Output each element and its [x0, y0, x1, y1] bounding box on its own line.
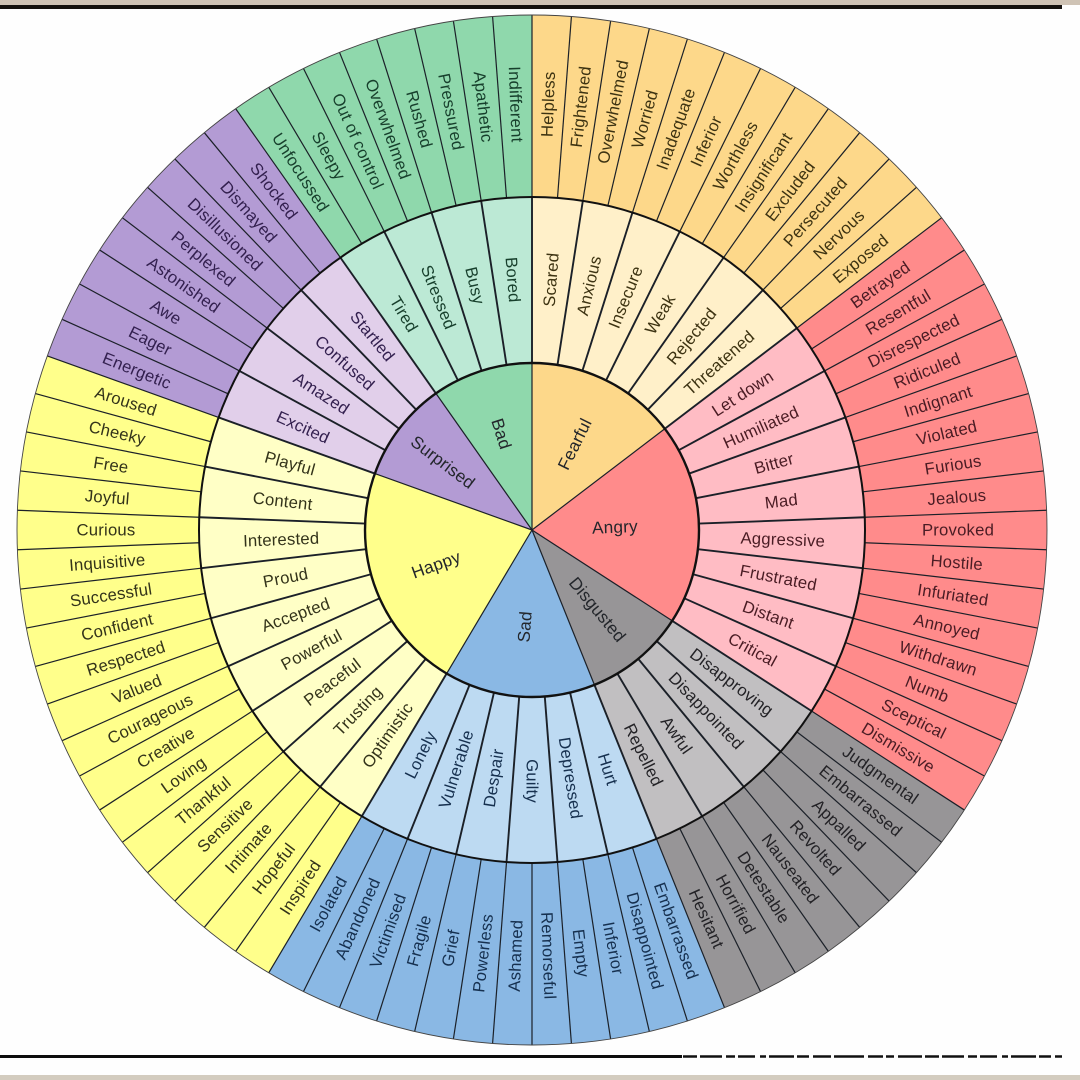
outer labels: Angry: Numb: [903, 672, 952, 707]
outer labels: Sad: Grief: [438, 928, 464, 968]
middle labels: Fearful: Insecure: [605, 263, 647, 331]
bottom border band: [0, 1055, 1080, 1080]
outer labels: Happy: Confident: [79, 609, 155, 645]
middle wedge: Angry: [532, 328, 865, 711]
outer labels: Happy: Creative: [134, 723, 198, 772]
outer labels: Bad: Pressured: [434, 72, 468, 152]
outer labels: Happy: Loving: [157, 753, 210, 797]
outer labels: Disgusted: Judgmental: [839, 742, 922, 808]
outer labels: Angry: Violated: [915, 417, 979, 449]
outer labels: Disgusted: Horrified: [712, 871, 759, 937]
middle labels: Sad: Hurt: [594, 751, 622, 788]
middle wedge: Bad: [340, 197, 532, 530]
inner wedge: Disgusted: [532, 530, 672, 685]
outer labels: Angry: Ridiculed: [891, 349, 963, 393]
outer labels: Fearful: Persecuted: [780, 173, 851, 251]
outer labels: Fearful: Worthless: [709, 118, 762, 194]
core emotion labels: [407, 415, 638, 646]
outer labels: Surprised: [100, 159, 301, 393]
outer labels: Happy: Courageous: [104, 690, 196, 748]
outer labels: Surprised: Astonished: [144, 253, 224, 317]
middle labels: Fearful: Scared: [540, 252, 563, 307]
outer labels: Fearful: Inferior: [687, 113, 726, 170]
middle labels: Sad: Despair: [480, 747, 508, 809]
outer labels: Angry: Resentful: [862, 286, 934, 339]
core emotion labels: Disgusted: [565, 573, 630, 646]
middle labels: Bad: Bored: [502, 256, 524, 303]
middle labels: Surprised: Excited: [273, 407, 332, 447]
outer labels: Bad: Rushed: [402, 88, 436, 150]
middle labels: Sad: Guilty: [522, 759, 542, 803]
outer labels: Surprised: Eager: [126, 322, 175, 360]
outer labels: Surprised: Awe: [147, 296, 185, 329]
middle labels: Bad: Stressed: [417, 262, 460, 332]
outer labels: Happy: Inspired: [276, 857, 325, 918]
middle labels: Sad: Lonely: [401, 728, 441, 782]
middle labels: Disgusted: [620, 644, 777, 789]
outer labels: Sad: Abandoned: [331, 875, 384, 962]
middle labels: Bad: Busy: [461, 265, 488, 307]
outer labels: Angry: Hostile: [930, 551, 984, 574]
sector: Sad: [269, 530, 725, 1045]
outer labels: Bad: Apathetic: [470, 70, 497, 143]
middle labels: Happy: Peaceful: [300, 654, 365, 710]
outer labels: Happy: Hopeful: [248, 840, 299, 898]
outer labels: Happy: Joyful: [84, 486, 130, 509]
middle labels: Disgusted: Disappointed: [665, 668, 748, 753]
middle labels: Disgusted: Repelled: [620, 720, 667, 789]
middle labels: Happy: Powerful: [278, 626, 345, 674]
inner wedge: Happy: [365, 474, 532, 674]
outer labels: Sad: Powerless: [469, 913, 497, 993]
outer labels: Disgusted: Detestable: [733, 848, 794, 927]
outer labels: Bad: Indifferent: [505, 66, 527, 143]
outer labels: Happy: Curious: [77, 520, 135, 540]
outer labels: Surprised: Perplexed: [168, 227, 239, 291]
middle labels: Fearful: [540, 252, 758, 399]
top border band: [0, 0, 1080, 9]
middle labels: Surprised: Confused: [311, 332, 378, 394]
outer wedge: Bad: [236, 15, 532, 530]
outer labels: Surprised: Energetic: [100, 348, 174, 393]
outer wedge: Surprised: [47, 109, 532, 530]
outer labels: Sad: Isolated: [306, 873, 351, 935]
outer labels: Angry: Dismissive: [858, 719, 938, 777]
middle labels: Angry: Bitter: [752, 449, 796, 478]
outer labels: Fearful: Insignificant: [731, 129, 796, 216]
inner wedge: Sad: [447, 530, 594, 697]
outer wedge: Sad: [269, 530, 725, 1045]
core emotion labels: Angry: [592, 516, 638, 538]
outer labels: Angry: Annoyed: [912, 610, 982, 644]
middle labels: Angry: [708, 367, 825, 671]
outer labels: Bad: Unfocussed: [268, 129, 333, 215]
outer labels: Fearful: Inadequate: [653, 86, 699, 173]
core emotion labels: Surprised: [407, 431, 479, 493]
middle labels: Angry: Distant: [740, 597, 797, 633]
outer wedge: Disgusted: [532, 530, 964, 1008]
outer labels: Happy: Intimate: [221, 819, 276, 877]
outer labels: Surprised: Disillusioned: [184, 194, 266, 275]
sector: Happy: [17, 356, 532, 973]
outer labels: Sad: Disappointed: [622, 890, 667, 991]
outer labels: Surprised: Dismayed: [216, 177, 281, 247]
outer labels: Happy: Sensitive: [193, 794, 257, 856]
middle labels: Angry: Let down: [708, 367, 777, 420]
middle labels: Surprised: [273, 308, 398, 447]
outer labels: Fearful: Overwhelmed: [594, 58, 632, 165]
outer labels: Fearful: Nervous: [809, 206, 868, 263]
middle labels: Surprised: Startled: [346, 308, 398, 365]
sector: Bad: [236, 15, 532, 530]
middle labels: Angry: Aggressive: [740, 529, 825, 551]
outer labels: Sad: Embarrassed: [650, 880, 702, 982]
outer labels: Angry: Betrayed: [847, 257, 914, 312]
outer labels: Bad: Overwhelmed: [361, 76, 415, 182]
middle labels: Happy: Interested: [243, 529, 320, 551]
inner wedge: Fearful: [532, 363, 665, 530]
middle labels: Surprised: Amazed: [290, 369, 353, 419]
outer labels: Happy: Aroused: [93, 383, 159, 420]
outer labels: Angry: Indignant: [902, 382, 975, 421]
outer labels: Disgusted: Hesitant: [685, 886, 728, 951]
middle labels: Fearful: Anxious: [573, 254, 605, 317]
middle labels: Happy: Playful: [263, 448, 317, 479]
middle labels: Fearful: Weak: [641, 290, 680, 338]
outer labels: Angry: Withdrawn: [897, 637, 979, 680]
outer labels: Happy: Cheeky: [87, 417, 148, 449]
outer wedge: Fearful: [532, 15, 942, 530]
middle labels: Fearful: Rejected: [663, 304, 720, 368]
outer labels: Happy: Successful: [69, 579, 153, 611]
outer labels: Disgusted: Embarrassed: [815, 761, 906, 841]
outer wedge: Angry: [532, 218, 1047, 810]
middle labels: Disgusted: Awful: [657, 713, 696, 758]
middle labels: Happy: Content: [252, 488, 314, 514]
outer labels: Fearful: Frightened: [567, 65, 595, 149]
core emotion labels: Happy: [409, 546, 463, 582]
outer labels: Angry: Jealous: [927, 486, 987, 509]
middle labels: Bad: Tired: [386, 293, 422, 336]
sector: Surprised: [47, 109, 532, 530]
outer labels: Happy: Respected: [84, 637, 168, 680]
outer labels: Sad: Ashamed: [505, 919, 527, 992]
outer labels: Angry: Disrespected: [865, 310, 963, 372]
middle labels: Happy: Accepted: [259, 594, 332, 636]
sector: Angry: [532, 218, 1047, 810]
inner wedge: Bad: [436, 363, 532, 530]
sector: Fearful: [532, 15, 942, 530]
middle wedge: Sad: [362, 530, 656, 863]
outer labels: Angry: [847, 257, 994, 777]
outer labels: Sad: Victimised: [366, 891, 410, 971]
core emotion labels: Fearful: [553, 415, 596, 473]
outer labels: Happy: Free: [92, 453, 130, 477]
middle labels: Happy: Optimistic: [358, 699, 417, 772]
outer labels: Disgusted: [685, 742, 922, 951]
outer labels: Fearful: Helpless: [538, 71, 559, 137]
outer labels: Angry: Provoked: [922, 520, 994, 540]
outer labels: Happy: Valued: [109, 671, 165, 708]
outer labels: Angry: Infuriated: [916, 580, 990, 610]
outer labels: Fearful: Excluded: [761, 158, 819, 225]
middle labels: Bad: [386, 256, 524, 336]
outer labels: Surprised: Shocked: [246, 159, 301, 223]
outer labels: Bad: Out of control: [328, 90, 387, 192]
inner wedge: Surprised: [375, 393, 532, 530]
outer labels: Happy: Inquisitive: [68, 550, 146, 575]
middle labels: Angry: Mad: [764, 490, 799, 513]
middle wedge: Happy: [199, 417, 532, 816]
middle labels: Sad: Vulnerable: [435, 728, 478, 811]
outer labels: Fearful: [538, 58, 892, 287]
middle labels: Sad: [401, 728, 622, 820]
outer labels: Happy: Thankful: [172, 773, 235, 829]
core emotion labels: Bad: [487, 416, 516, 452]
outer labels: Disgusted: Revolted: [786, 817, 845, 880]
outer labels: Sad: Empty: [569, 928, 593, 979]
middle labels: Angry: Frustrated: [738, 561, 819, 595]
outer labels: Angry: Furious: [923, 451, 983, 479]
outer labels: Sad: [306, 873, 702, 1000]
sector: Disgusted: [532, 530, 964, 1008]
outer labels: Fearful: Worried: [628, 88, 662, 150]
middle labels: Angry: Humiliated: [720, 402, 802, 453]
core emotion labels: Sad: [513, 610, 536, 643]
middle labels: Happy: Trusting: [330, 682, 386, 740]
inner wedge: Angry: [532, 429, 699, 621]
middle wedge: Fearful: [532, 197, 797, 530]
middle labels: Angry: Critical: [725, 629, 780, 671]
outer labels: Happy: [68, 383, 325, 918]
outer labels: Sad: Fragile: [403, 913, 435, 969]
outer labels: Bad: Sleepy: [308, 128, 350, 184]
middle wedge: Surprised: [219, 258, 532, 530]
outer labels: Bad: [268, 66, 527, 215]
outer labels: Sad: Remorseful: [537, 912, 559, 1000]
middle labels: Fearful: Threatened: [680, 327, 758, 399]
middle labels: Happy: Proud: [261, 564, 310, 591]
middle labels: Happy: [243, 448, 417, 772]
middle labels: Sad: Depressed: [555, 736, 586, 820]
middle wedge: Disgusted: [532, 530, 812, 839]
outer labels: Sad: Inferior: [599, 920, 628, 977]
outer labels: Angry: Sceptical: [878, 695, 949, 743]
outer labels: Fearful: Exposed: [829, 231, 892, 287]
outer labels: Disgusted: Appalled: [808, 795, 870, 855]
middle labels: Disgusted: Disapproving: [686, 644, 777, 720]
outer labels: Disgusted: Nauseated: [758, 830, 823, 907]
outer wedge: Happy: [17, 356, 532, 973]
